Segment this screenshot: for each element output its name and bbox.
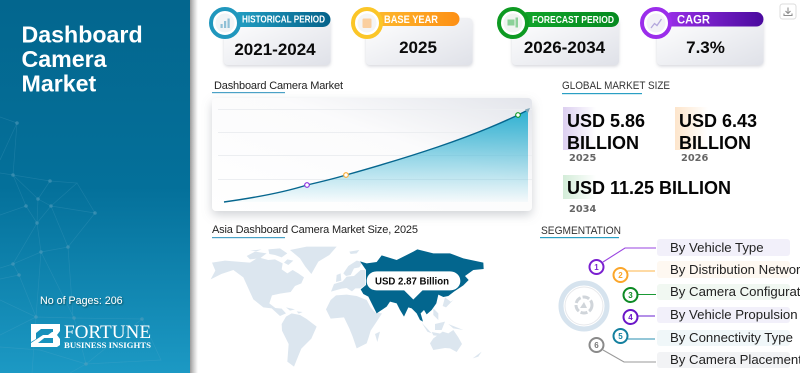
panel: forecast period: 2026-2034 <box>524 38 606 57</box>
stat: 2034 value: USD 11.25 BILLION <box>567 178 731 198</box>
title: Dashboard <box>22 22 143 48</box>
logo: Fortune Business Insights <box>31 323 151 350</box>
badges: numbered segments <box>590 260 638 352</box>
stat: 2025 value: BILLION <box>567 133 639 153</box>
panel: CAGR <box>642 9 764 65</box>
row: by vehicle type: By Vehicle Type <box>670 240 764 255</box>
map: indonesia <box>422 322 463 337</box>
badge 2: 2 <box>618 271 623 280</box>
map: caribbean <box>286 307 303 314</box>
marker: 2034 <box>516 113 520 117</box>
title: Market <box>22 70 97 96</box>
text: number of pages: No of Pages: 206 <box>40 295 123 307</box>
icon: download <box>780 4 796 19</box>
panel: historical period: 2021-2024 <box>234 40 316 59</box>
marker: 2025 <box>305 183 309 187</box>
panel: CAGR: CAGR <box>677 12 710 26</box>
title: Camera <box>22 46 108 72</box>
stat: 2026 value: USD 6.43 <box>679 111 757 131</box>
pill: historical period <box>232 12 330 27</box>
badge 4: 4 <box>628 313 633 322</box>
stat: 2034 value <box>563 175 731 215</box>
badge 5: 5 <box>618 332 623 341</box>
callout: asia value <box>366 271 461 300</box>
stat: 2034 value: 2034 <box>569 204 596 215</box>
panel: forecast period: FORECAST PERIOD <box>532 15 614 26</box>
chart: market growth <box>212 98 532 211</box>
map: new zealand <box>473 352 482 358</box>
stat: 2025 value <box>563 107 645 164</box>
panel: CAGR: 7.3% <box>686 38 725 57</box>
stat: 2026 value: BILLION <box>679 133 751 153</box>
icon: calendar <box>362 18 372 28</box>
panel: base year: 2025 <box>399 38 437 57</box>
title <box>22 22 143 96</box>
map: north america <box>211 257 304 316</box>
map: scandinavia <box>343 261 363 276</box>
chart area <box>224 110 528 202</box>
heading: global market size: GLOBAL MARKET SIZE <box>562 80 670 92</box>
map: africa <box>326 295 382 348</box>
map: canadian arctic islands <box>247 248 293 265</box>
stat: 2026 value: 2026 <box>681 153 708 164</box>
map: iceland <box>349 250 359 254</box>
badge 1: 1 <box>594 263 599 272</box>
panel: historical period <box>211 9 330 65</box>
icon: forecast screen <box>508 18 518 28</box>
stat: 2025 value: 2025 <box>569 153 596 164</box>
map: british isles <box>336 273 341 282</box>
panel: base year <box>353 9 472 65</box>
map: madagascar <box>375 332 380 342</box>
logo: Fortune Business Insights: BUSINESS INSIGHTS <box>64 340 151 350</box>
stat: 2025 value: USD 5.86 <box>567 111 645 131</box>
connectors <box>603 248 656 362</box>
icon: segmentation hub <box>561 283 607 329</box>
map: asia highlighted <box>360 249 484 322</box>
badge 6: 6 <box>594 341 599 350</box>
panel: sidebar <box>0 0 198 373</box>
icon: growth chart <box>651 19 662 28</box>
row: by vehicle type <box>657 239 790 256</box>
map: south america <box>282 313 317 367</box>
map: japan and philippines <box>433 297 453 320</box>
map: greenland <box>290 247 337 274</box>
trend line <box>224 111 526 202</box>
heading: asia market size: Asia Dashboard Camera Market Size, 2025 <box>212 224 418 236</box>
panel: historical period: HISTORICAL PERIOD <box>242 14 325 26</box>
callout: asia value: USD 2.87 Billion <box>375 277 449 288</box>
map: australia <box>430 330 462 352</box>
stat: 2026 value <box>675 107 757 164</box>
icon: bars <box>220 18 230 28</box>
heading: segmentation: SEGMENTATION <box>541 225 621 237</box>
panel: forecast period <box>499 9 619 65</box>
row: by camera placement: By Camera Placement <box>670 352 800 367</box>
row: by connectivity type: By Connectivity Type <box>670 330 793 345</box>
logo: Fortune Business Insights: FORTUNE <box>64 323 151 343</box>
marker: 2026 <box>344 173 348 177</box>
heading: dashboard camera market: Dashboard Camera Market <box>214 80 343 92</box>
panel: base year: BASE YEAR <box>384 14 438 26</box>
badge 3: 3 <box>628 291 633 300</box>
map: world <box>211 247 484 367</box>
map: europe <box>331 270 366 292</box>
arrow tip <box>525 108 530 113</box>
